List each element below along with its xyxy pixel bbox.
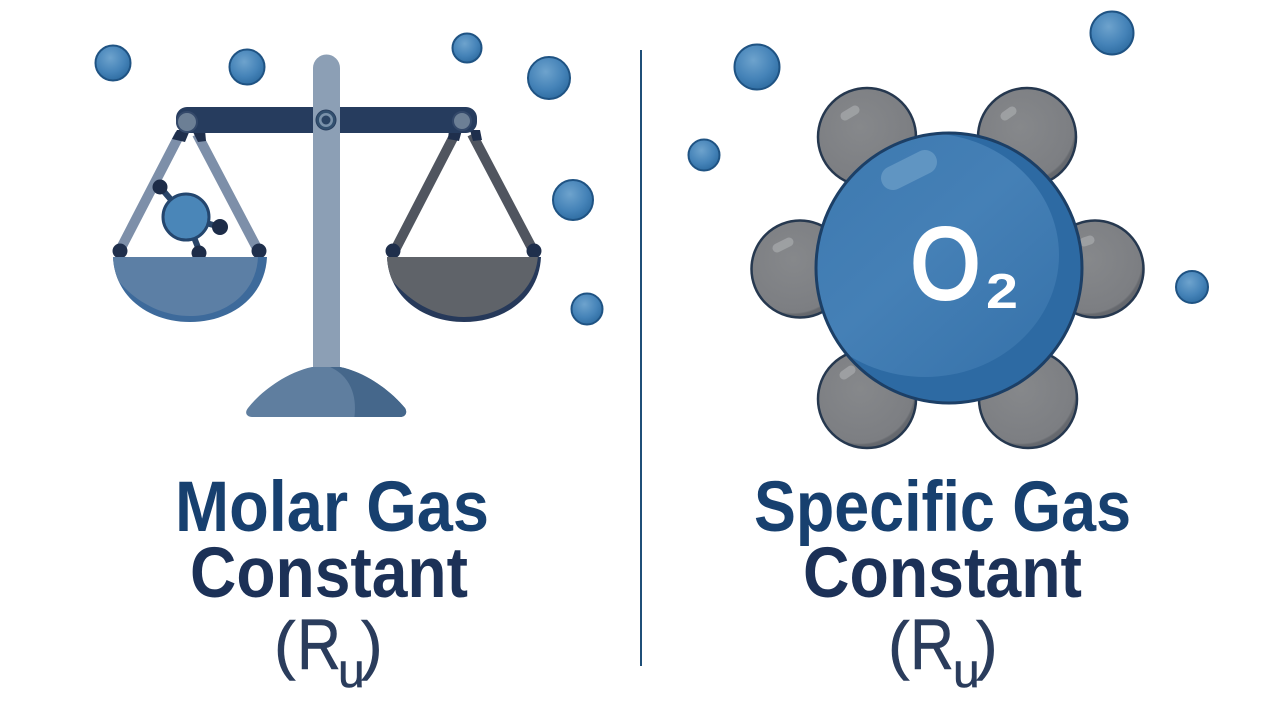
icon: oxygen molecule bbox=[752, 88, 1144, 448]
symbol: R u left bbox=[274, 606, 383, 698]
symbol: R u right: ) bbox=[976, 608, 998, 681]
scale beam bbox=[176, 107, 477, 133]
formula O2: 2 bbox=[986, 265, 1018, 319]
right floating gas particles bbox=[688, 12, 1208, 303]
surrounding gray atoms bbox=[752, 88, 1144, 448]
heading: Specific Gas Constant: Constant bbox=[803, 534, 1082, 613]
formula O2: O bbox=[911, 208, 980, 320]
sphere highlight bbox=[893, 162, 925, 178]
symbol: R u right: R bbox=[910, 606, 954, 685]
heading: Molar Gas Constant bbox=[175, 468, 489, 613]
molecule on left pan bbox=[152, 180, 228, 260]
symbol: R u right: ( bbox=[888, 608, 910, 681]
left pan bbox=[113, 257, 267, 322]
symbol: R u left: ( bbox=[274, 608, 296, 681]
heading: Molar Gas Constant: Constant bbox=[190, 534, 468, 613]
symbol: R u left: ) bbox=[361, 608, 383, 681]
atom highlights bbox=[777, 110, 1090, 375]
pole front and centre pivot bbox=[313, 100, 340, 138]
symbol: R u left: u bbox=[338, 645, 365, 698]
left floating gas particles bbox=[96, 34, 602, 324]
symbol: R u left: R bbox=[297, 606, 341, 685]
scale base bbox=[246, 367, 406, 417]
right pan bbox=[387, 257, 541, 322]
heading: Specific Gas Constant bbox=[754, 468, 1131, 613]
beam pivots bbox=[177, 112, 471, 132]
central blue sphere bbox=[818, 134, 1080, 402]
divider bbox=[640, 50, 642, 666]
arm joints bbox=[112, 130, 542, 258]
symbol: R u right: u bbox=[953, 645, 980, 698]
symbol: R u right bbox=[888, 606, 998, 698]
right pan arms bbox=[394, 134, 534, 252]
icon: balance scale bbox=[110, 54, 544, 420]
heading: Molar Gas Constant: Molar Gas bbox=[175, 468, 489, 547]
heading: Specific Gas Constant: Specific Gas bbox=[754, 468, 1131, 547]
left pan arms bbox=[119, 134, 259, 252]
scale pole bbox=[313, 54, 340, 368]
